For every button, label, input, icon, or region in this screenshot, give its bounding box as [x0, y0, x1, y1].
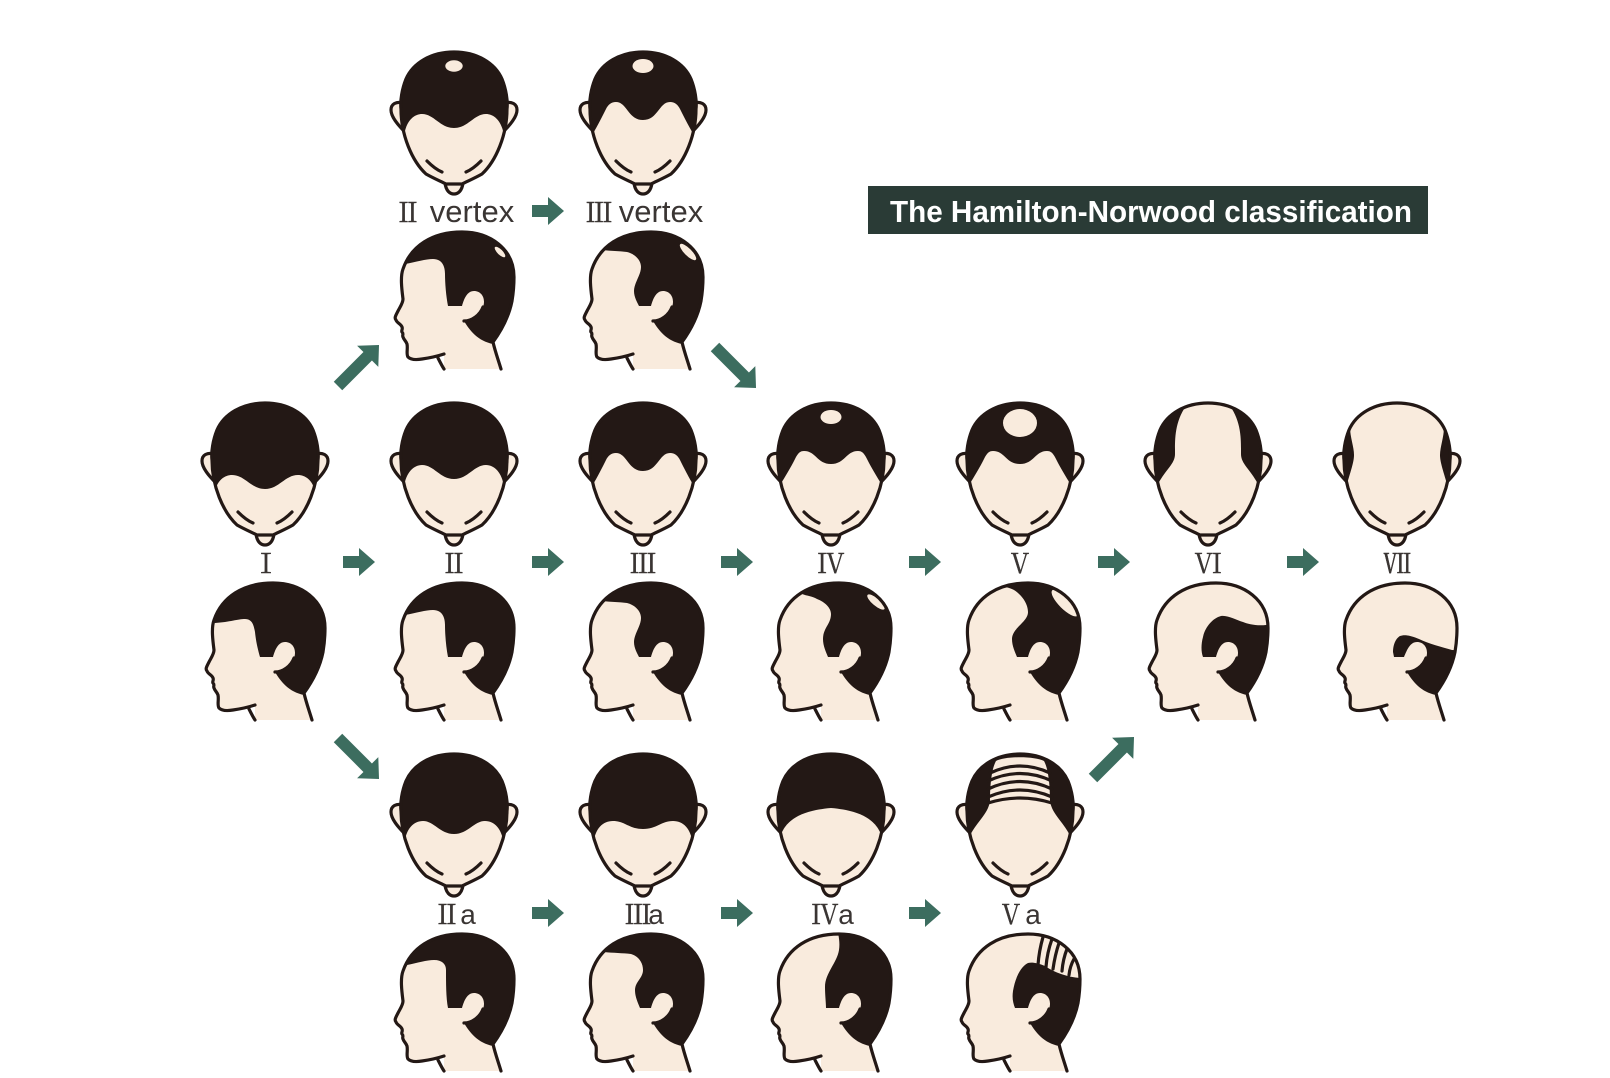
label: III vertex	[586, 191, 704, 230]
arrow: IIa to IIIa	[532, 899, 564, 927]
top view: IV	[768, 403, 894, 552]
top view: IVa	[768, 754, 894, 903]
side view: Va	[960, 932, 1082, 1073]
label: IIa	[434, 893, 476, 932]
top view: Va	[957, 754, 1083, 903]
label: II vertex: Ⅱ	[394, 191, 422, 230]
label: IIIa: Ⅲ	[624, 893, 652, 932]
arrow: III vertex down to IV	[704, 336, 767, 399]
label: V: Ⅴ	[1006, 542, 1034, 581]
label: IIIa	[624, 893, 664, 932]
arrow: II to III	[532, 548, 564, 576]
label: II vertex: vertex	[430, 194, 515, 229]
label: VII: Ⅶ	[1384, 542, 1410, 581]
label: Va	[998, 893, 1041, 932]
label: IIa: a	[460, 899, 476, 930]
arrow: III to IV	[721, 548, 753, 576]
side view: IVa	[770, 932, 893, 1073]
top view: II vertex	[391, 52, 517, 201]
side view: II vertex	[394, 230, 516, 371]
top view: III vertex	[580, 52, 706, 201]
side view: IIa	[394, 932, 516, 1073]
top view: VI	[1145, 402, 1271, 552]
label: IVa	[812, 893, 854, 932]
arrow: I down to IIa	[327, 727, 390, 790]
arrow: I up to II vertex	[327, 334, 390, 397]
side view: III vertex	[582, 230, 705, 371]
top view: VII	[1334, 402, 1460, 552]
title banner	[868, 186, 1428, 234]
label: III: Ⅲ	[630, 542, 656, 581]
label: VI: Ⅵ	[1194, 542, 1222, 581]
arrow: VI to VII	[1287, 548, 1319, 576]
top view: IIIa	[580, 754, 706, 903]
label: IIIa: a	[648, 899, 664, 930]
top view: III	[580, 403, 706, 552]
side view: IIIa	[582, 932, 705, 1073]
arrow: IIIa to IVa	[721, 899, 753, 927]
side view: IV	[770, 581, 893, 722]
top view: V	[957, 403, 1083, 552]
top view: II	[391, 403, 517, 552]
arrow: II vertex to III vertex	[532, 197, 564, 225]
side view: VII	[1336, 581, 1459, 722]
side view: V	[960, 581, 1082, 722]
label: Va: a	[1025, 899, 1041, 930]
top view: IIa	[391, 754, 517, 903]
label: I: Ⅰ	[252, 542, 280, 581]
label: II: Ⅱ	[440, 542, 468, 581]
label: IV: Ⅳ	[818, 542, 844, 581]
top view: I	[202, 403, 328, 552]
arrow: IVa to Va	[909, 899, 941, 927]
arrow: IV to V	[909, 548, 941, 576]
label: III vertex: vertex	[619, 194, 704, 229]
label: II vertex	[394, 191, 515, 230]
arrow: V to VI	[1098, 548, 1130, 576]
label: IVa: Ⅳ	[812, 893, 838, 932]
side view: II	[394, 581, 516, 722]
arrow: Va up to VI	[1082, 726, 1145, 789]
label: III vertex: Ⅲ	[586, 191, 612, 230]
side view: VI	[1148, 581, 1270, 722]
label: Va: Ⅴ	[998, 893, 1024, 932]
title banner: The Hamilton-Norwood classification	[890, 194, 1412, 229]
label: IIa: Ⅱ	[434, 893, 460, 932]
side view: I	[204, 581, 327, 722]
arrow: I to II	[343, 548, 375, 576]
side view: III	[582, 581, 705, 722]
label: IVa: a	[838, 899, 854, 930]
